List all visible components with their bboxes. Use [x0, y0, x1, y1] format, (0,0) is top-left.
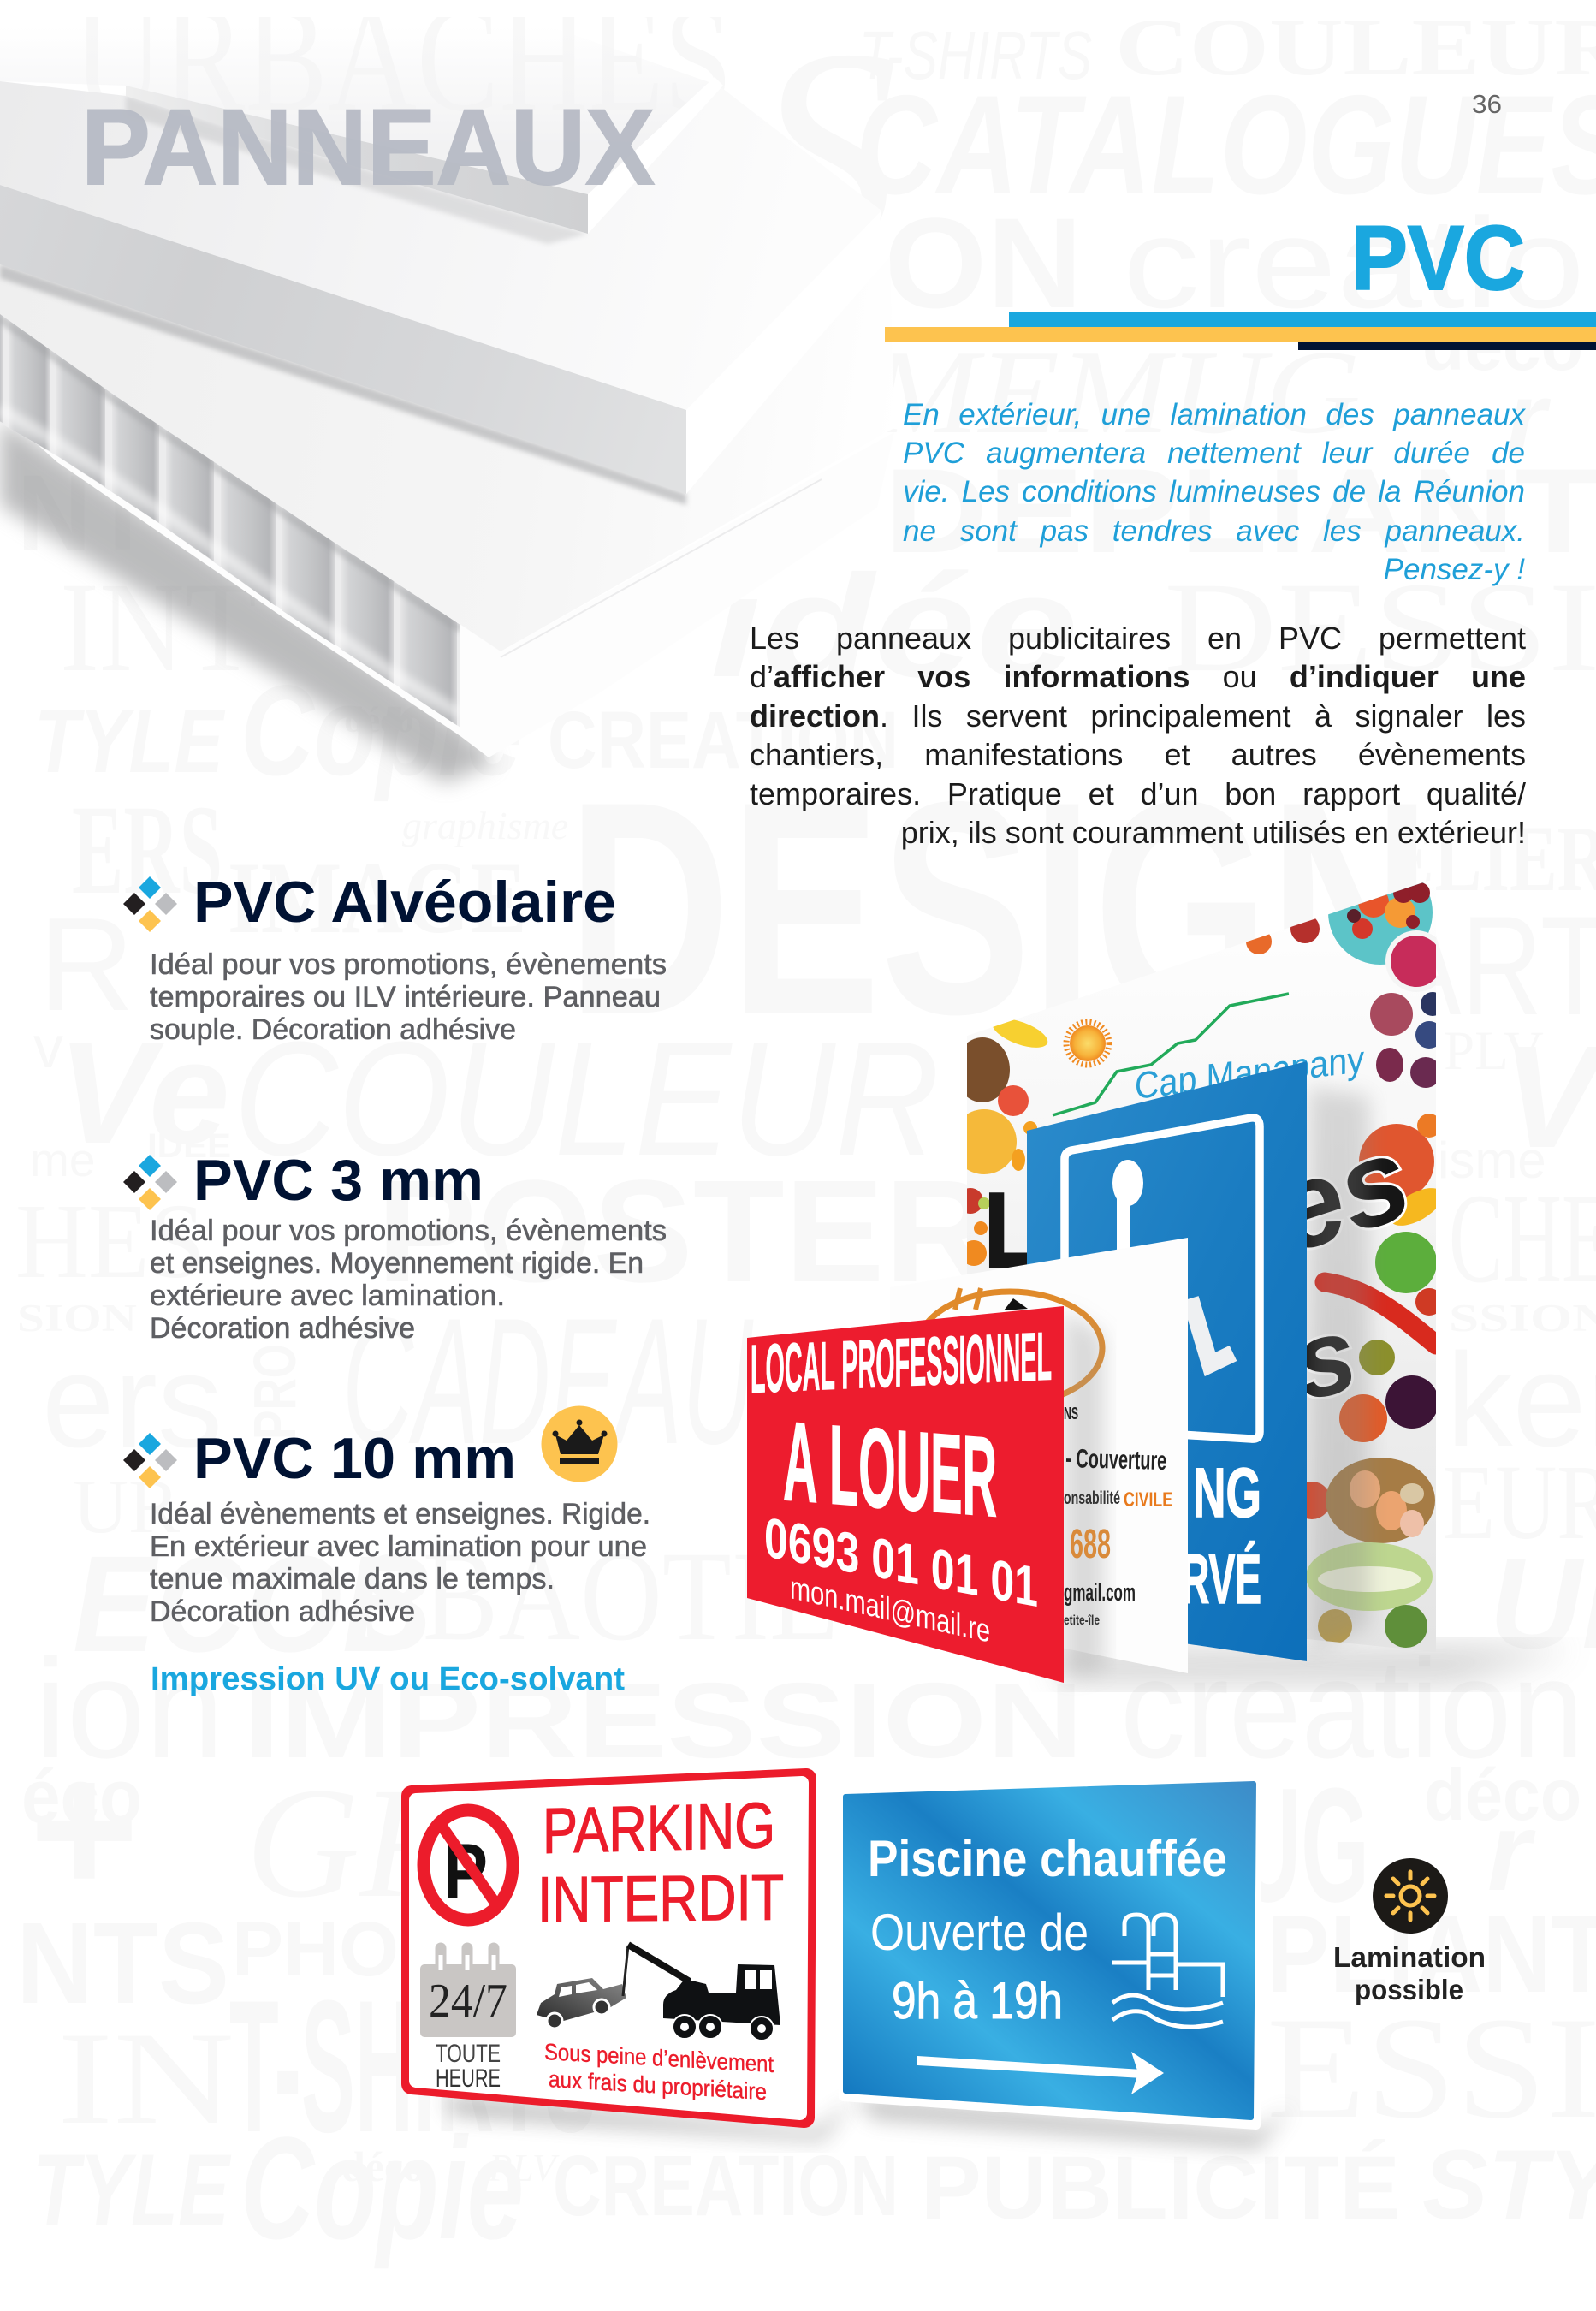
- blue parking sign: [1027, 1061, 1307, 1661]
- background watermark words: CREATION: [553, 2138, 899, 2234]
- no parking symbol: P: [443, 1828, 488, 1916]
- calendar 24/7: [420, 1948, 516, 2037]
- sign: parking interdit: Sous peine d’enlèvement: [544, 2039, 774, 2077]
- sign: piscine chauffée: Piscine chauffée: [868, 1830, 1227, 1887]
- blue parking sign: RVÉ: [1181, 1541, 1261, 1619]
- page number: 36: [1472, 89, 1502, 119]
- fluted sheet lower lip: [0, 314, 894, 757]
- white business card sign: gmail.com: [1064, 1579, 1136, 1607]
- intro paragraph: prix, ils sont couramment utilisés en extérieur!: [901, 815, 1526, 850]
- shadow on poster: [1309, 1087, 1369, 1652]
- background watermark words: déco: [341, 2142, 424, 2190]
- fluted sheet top surface: [0, 257, 894, 651]
- background watermark words: Copie: [240, 658, 523, 802]
- background watermark words: +: [26, 1723, 135, 1934]
- description: extérieure avec lamination.: [150, 1280, 505, 1312]
- red "A louer" sign: 0693 01 01 01: [764, 1506, 1038, 1619]
- mockup: stack of PVC signs: [747, 860, 1575, 1699]
- background watermark words: PUBLICITÉ: [921, 2138, 1400, 2238]
- background watermark words: PLV: [1444, 1020, 1544, 1082]
- lamination advice paragraph: PVC augmentera nettement leur durée de: [903, 437, 1525, 470]
- background watermark words: graphisme: [402, 804, 568, 847]
- lamination advice paragraph: vie. Les conditions lumineuses de la Réunion: [903, 475, 1525, 508]
- description: Idéal pour vos promotions, évènements: [150, 1215, 667, 1247]
- background watermark words: IMAGE: [228, 841, 527, 954]
- lower fluted sheet shadow: [0, 419, 495, 783]
- background watermark words: déco: [1422, 307, 1583, 385]
- background watermark words: INT: [60, 556, 257, 698]
- white business card sign: - Couverture: [1065, 1443, 1167, 1476]
- sign letters: NG: [1193, 1454, 1261, 1532]
- big poster letters: es: [1257, 1109, 1425, 1279]
- sign: piscine chauffée: [843, 1777, 1292, 2148]
- diamond bullet: [123, 1433, 177, 1488]
- background watermark words: IMPRESSION: [243, 1661, 1083, 1780]
- red "A louer" sign: [747, 1306, 1064, 1683]
- description: souple. Décoration adhésive: [150, 1013, 516, 1046]
- top sheet shadow: [126, 96, 588, 244]
- background watermark words: UG: [1237, 1755, 1369, 1936]
- icon: sun in black circle (lamination): [1373, 1858, 1448, 1934]
- background watermark words: DEPLIANT: [884, 443, 1596, 578]
- person symbol: [1112, 1160, 1233, 1364]
- background watermark words: PLV: [488, 2147, 560, 2189]
- background watermark words: T-SHIRTS: [859, 17, 1092, 93]
- background watermark words: isme: [1438, 1132, 1546, 1189]
- growth line: [1053, 994, 1289, 1115]
- background watermark words: CREATION: [548, 695, 899, 786]
- background watermark words: ers: [42, 1327, 222, 1475]
- description: [150, 1498, 650, 1628]
- background watermark words: IDÉE: [147, 1126, 231, 1165]
- lamination advice paragraph: [903, 398, 1526, 586]
- honeycomb channels of fluted sheet: [0, 291, 460, 728]
- background watermark words: SSION: [1449, 1297, 1596, 1340]
- sign: parking interdit: [412, 1779, 856, 2140]
- sign: parking interdit: PARKING: [543, 1789, 775, 1867]
- background watermark words: déco: [1424, 1755, 1581, 1836]
- icon: pool ladder: [1112, 1915, 1223, 2027]
- sign: piscine chauffée: 9h à 19h: [892, 1972, 1063, 2029]
- sign: parking interdit: HEURE: [436, 2064, 501, 2093]
- background watermark words: creatio: [1123, 191, 1585, 335]
- diamond bullet: [123, 1155, 177, 1210]
- background watermark words: TYLE: [33, 2133, 232, 2248]
- background watermark words: idée: [710, 545, 1078, 708]
- background watermark words: PHO: [232, 1907, 399, 1993]
- background watermark words: déco: [344, 701, 414, 740]
- lamination advice paragraph: ne sont pas tendres avec les panneaux.: [903, 514, 1525, 548]
- description: Décoration adhésive: [150, 1595, 415, 1628]
- calendar 24/7: 24/7: [429, 1975, 507, 2028]
- red "A louer" sign: mon.mail@mail.re: [790, 1569, 990, 1650]
- intro paragraph: d’afficher vos informations ou d’indiquer une: [750, 659, 1526, 694]
- big poster letters: L: [985, 1172, 1036, 1288]
- red "A louer" sign: A LOUER: [783, 1398, 997, 1542]
- sun graphic: [1066, 1022, 1109, 1065]
- background watermark words: ECOB: [73, 1527, 432, 1680]
- background watermark words: ion: [35, 1630, 224, 1787]
- label: lamination possible: [1333, 1941, 1486, 2005]
- tow truck and car: [537, 1945, 780, 2041]
- no parking symbol: [424, 1810, 513, 1920]
- background watermark words: GRA: [246, 1756, 555, 1931]
- background watermark words: HES: [15, 1183, 205, 1301]
- heading: PVC Alvéolaire: [193, 870, 616, 935]
- heading: PVC: PVC: [1351, 206, 1525, 309]
- intro paragraph: temporaires. Pratique et d’un bon rapport qualité/: [750, 776, 1526, 811]
- background watermark words: Copie: [240, 2107, 524, 2270]
- direction arrow: [917, 2052, 1164, 2094]
- floor shadow: [1061, 1648, 1575, 1682]
- intro paragraph: [750, 621, 1526, 850]
- white business card sign: NS: [1064, 1405, 1078, 1423]
- background watermark words: r: [1487, 1789, 1536, 1914]
- big poster letters: [985, 1109, 1425, 1423]
- white business card sign: [890, 1238, 1188, 1678]
- intro paragraph: Les panneaux publicitaires en PVC permettent: [750, 621, 1526, 656]
- white business card sign: 688: [1070, 1522, 1111, 1567]
- white business card sign: CIVILE: [1124, 1488, 1172, 1512]
- background watermark words: IN: [57, 2005, 234, 2152]
- white business card sign: onsabilité: [1064, 1488, 1120, 1508]
- background watermark words: v: [33, 1013, 63, 1080]
- description: [150, 948, 667, 1046]
- fruit poster: [967, 882, 1436, 1648]
- background watermark words: NT: [17, 454, 154, 573]
- description: Idéal pour vos promotions, évènements: [150, 948, 667, 981]
- sign: piscine chauffée: Ouverte de: [870, 1904, 1089, 1961]
- mockup: stack of PVC signs: LOCAL PROFESSIONNEL: [751, 1318, 1052, 1407]
- label: lamination possible: possible: [1355, 1974, 1463, 2005]
- background watermark words: r: [1506, 361, 1552, 476]
- foam sheet front face: [0, 185, 686, 494]
- background watermark words: ERS: [72, 779, 222, 921]
- description: [150, 1215, 667, 1345]
- product: PVC 3 mm: [123, 1148, 667, 1345]
- icon: crown badge: [541, 1405, 618, 1482]
- background watermark words: MEMUG: [867, 326, 1361, 459]
- description: En extérieur avec lamination pour une: [150, 1530, 647, 1563]
- fruits decoration: [952, 860, 1448, 1648]
- background watermark words: T-SHIRTS: [229, 1961, 597, 2171]
- top sheet surface: [0, 26, 719, 194]
- foam sheet shadow: [0, 264, 686, 505]
- heading: PVC 10 mm: [193, 1426, 516, 1491]
- section title: PANNEAUX: PANNEAUX: [81, 88, 655, 207]
- print method note: Impression UV ou Eco-solvant: [151, 1661, 625, 1697]
- white business card sign: etite-île: [1064, 1613, 1100, 1628]
- background watermark words: POSTER: [377, 1150, 993, 1313]
- background watermark words: Ve: [57, 1012, 230, 1174]
- intro paragraph: direction. Ils servent principalement à signaler les: [750, 698, 1526, 734]
- tricolor rule bars: [885, 312, 1596, 350]
- background watermark words: TYLE: [34, 692, 225, 792]
- background watermark words: DESSI: [1164, 556, 1596, 698]
- foam sheet top surface: [0, 81, 881, 410]
- diamond bullet: [123, 876, 177, 932]
- background watermark words: ON: [884, 191, 1083, 335]
- company name: Cap Manapany: [1135, 1038, 1364, 1108]
- background watermark words: SBAOTIE: [359, 1525, 839, 1667]
- product: PVC 10 mm: [123, 1405, 650, 1628]
- background watermark words: éco: [21, 1754, 142, 1839]
- lamination advice paragraph: En extérieur, une lamination des panneaux: [903, 398, 1525, 431]
- background watermark words: CADEAU: [342, 1280, 754, 1482]
- label: lamination possible: Lamination: [1333, 1941, 1486, 1973]
- sign: parking interdit: INTERDIT: [537, 1861, 784, 1935]
- description: temporaires ou ILV intérieure. Panneau: [150, 981, 661, 1013]
- photo: stacked white PVC sheets: [0, 81, 822, 791]
- foam sheet white side edge: [686, 211, 881, 494]
- lamination advice paragraph: Pensez-y !: [1384, 553, 1525, 586]
- background watermark words: ESSI: [1267, 1987, 1596, 2148]
- intro paragraph: chantiers, manifestations et autres évènements: [750, 737, 1526, 772]
- big poster letters: s: [1284, 1294, 1367, 1423]
- background watermark words: R: [39, 890, 134, 1038]
- background watermark words: NTS: [16, 1898, 229, 2028]
- background watermark words: UR: [73, 1464, 180, 1549]
- description: Idéal évènements et enseignes. Rigide.: [150, 1498, 650, 1530]
- product: PVC Alvéolaire: [123, 870, 667, 1046]
- heading: PVC 3 mm: [193, 1148, 484, 1213]
- background watermark words: COULEUR: [1115, 2, 1596, 92]
- sign: parking interdit: aux frais du propriétaire: [549, 2066, 767, 2105]
- parking symbol frame: [1065, 1118, 1260, 1439]
- sign: parking interdit: TOUTE: [436, 2040, 501, 2068]
- top sheet front face: [126, 86, 588, 234]
- description: tenue maximale dans le temps.: [150, 1563, 555, 1595]
- description: et enseignes. Moyennement rigide. En: [150, 1247, 644, 1280]
- background watermark words: me: [30, 1133, 95, 1186]
- description: Décoration adhésive: [150, 1312, 415, 1345]
- background watermark words: PRO: [241, 1344, 308, 1440]
- background watermark words: SION: [17, 1297, 137, 1340]
- background watermark words: COULEUR: [234, 1008, 940, 1190]
